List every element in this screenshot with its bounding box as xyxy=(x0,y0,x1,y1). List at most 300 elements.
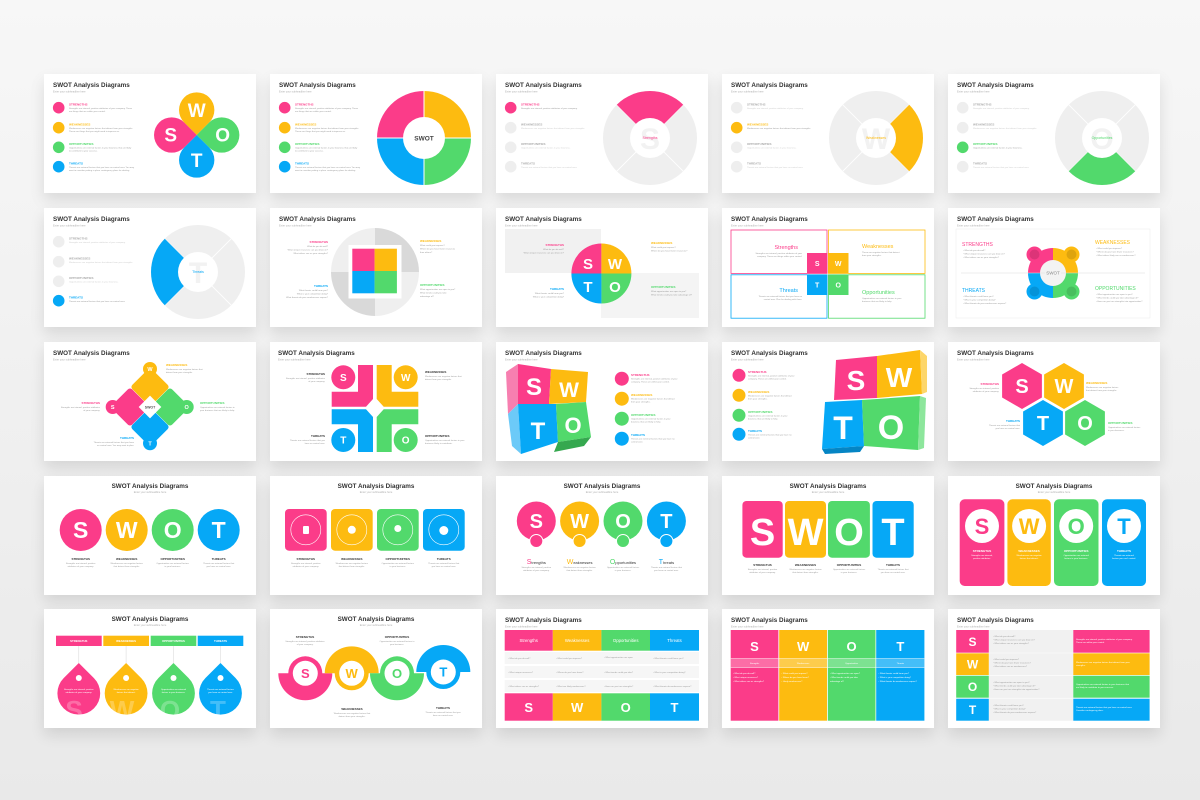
text blocks: Strengths are internal, positive attributes xyxy=(286,377,326,380)
list: STRENGTHS xyxy=(631,373,650,377)
text blocks: What is your competition doing? xyxy=(533,296,565,298)
text blocks: WEAKNESSES xyxy=(166,363,187,367)
drops: you have no control over. xyxy=(208,691,233,694)
text blocks: STRENGTHS xyxy=(980,382,999,386)
cubes xyxy=(506,364,591,454)
drops: Threats are external factors xyxy=(207,688,235,691)
title xyxy=(957,216,1034,228)
labels: of your company. xyxy=(297,643,314,646)
columns: • What threats do weaknesses expose? xyxy=(878,680,918,683)
labels: Threats are external factors that xyxy=(651,566,682,569)
list xyxy=(53,102,135,172)
title xyxy=(731,617,808,628)
columns: factors you can't control. xyxy=(1112,557,1136,560)
title: SWOT Analysis Diagrams xyxy=(338,483,415,490)
text blocks: • Where do you have fewer resources? xyxy=(1096,250,1135,254)
hexagons: S xyxy=(1015,376,1029,398)
title xyxy=(505,216,582,228)
text blocks: THREATS xyxy=(1006,419,1020,423)
letter blocks xyxy=(742,501,914,558)
list: OPPORTUNITIES xyxy=(973,142,998,146)
labels: Threats are external factors that xyxy=(877,568,909,571)
list: Threats are external factors that you have no control over. xyxy=(521,166,577,169)
columns: Weaknesses xyxy=(797,663,810,665)
question rows: • Where do you have fewer? xyxy=(556,671,584,674)
labels: in your business. xyxy=(841,571,858,574)
columns: • What others see as strengths? xyxy=(733,680,765,683)
columns: W xyxy=(797,639,810,654)
columns: Strengths xyxy=(750,662,760,665)
text blocks: What could you improve? xyxy=(651,246,676,249)
rows: T xyxy=(969,703,977,717)
list: Strengths are internal, positive attributes of your company. xyxy=(747,107,804,110)
list: Strengths are internal, positive attributes of your xyxy=(748,374,795,378)
title xyxy=(112,616,189,627)
title xyxy=(505,617,582,628)
ring with highlighted segment: O xyxy=(1090,123,1114,156)
labels: STRENGTHS xyxy=(297,557,315,561)
slide 8: SWOT circle quadrants xyxy=(496,208,708,327)
list xyxy=(53,236,133,306)
box texts: Opportunities xyxy=(862,290,895,296)
rows: • What trends could you take advantage of? xyxy=(993,684,1036,688)
slide 18: balloons xyxy=(496,476,708,595)
columns: Weaknesses are negative xyxy=(1017,554,1042,557)
rows: O xyxy=(968,680,977,694)
text blocks: WEAKNESSES xyxy=(1086,381,1107,385)
puzzle diagram: S xyxy=(340,373,347,384)
list: Threats are external factors that you have no control over. You may xyxy=(295,166,361,169)
title: Enter your subheadline here xyxy=(505,624,538,628)
cubes: T xyxy=(833,410,853,446)
labels: Strengths are internal, positive xyxy=(748,568,778,571)
text blocks: Opportunities are external factors in xyxy=(200,406,235,409)
title xyxy=(53,350,130,362)
slide 9: bordered boxes xyxy=(722,208,934,327)
rows: • What threats do your weaknesses expose? xyxy=(993,711,1037,714)
labels: Weaknesses are negative factors xyxy=(563,566,597,569)
labels: WEAKNESSES xyxy=(341,557,362,561)
circles: T xyxy=(212,517,226,543)
text blocks: What threats do your weaknesses expose? xyxy=(286,296,329,299)
slide 1: clover SWOT xyxy=(44,74,256,193)
list: business that are likely to help. xyxy=(631,420,661,424)
circle quadrants xyxy=(571,244,631,304)
text blocks: STRENGTHS xyxy=(306,372,325,376)
title xyxy=(53,82,130,94)
list: Threats are external factors that you have no xyxy=(631,438,675,440)
list: STRENGTHS xyxy=(295,102,314,106)
labels: attributes of your company. xyxy=(749,571,776,574)
list: company. These are within your control. xyxy=(748,378,787,380)
rows: • What others see as your strengths? xyxy=(993,642,1030,645)
labels: Strengths are internal, positive xyxy=(522,566,552,569)
slide 13: 3D cubes left xyxy=(496,342,708,461)
header bars: STRENGTHS xyxy=(70,639,88,643)
cubes: T xyxy=(531,418,546,445)
flower diagram: SWOT xyxy=(1046,270,1060,276)
list xyxy=(279,102,361,172)
labels: Weaknesses are negative factors xyxy=(789,568,823,571)
drops: Weaknesses are negative xyxy=(114,688,139,691)
boxes xyxy=(731,230,925,318)
header bars: THREATS xyxy=(214,639,227,643)
drops: Strengths are internal, positive xyxy=(64,688,94,691)
grey circle with colour grid xyxy=(331,228,419,316)
list: Threats are external factors that you have no xyxy=(748,434,792,436)
circles xyxy=(60,509,240,551)
title: Enter your subheadline here xyxy=(53,224,86,228)
columns: factors in your business. xyxy=(1064,557,1088,560)
diamond diagram xyxy=(106,362,194,450)
title: Enter your subheadline here xyxy=(586,490,619,494)
diamond diagram: W xyxy=(147,367,153,373)
text blocks: advantage of? xyxy=(420,295,435,298)
labels: THREATS xyxy=(212,557,226,561)
text blocks: OPPORTUNITIES xyxy=(651,285,676,289)
text blocks: of your company. xyxy=(308,380,325,383)
columns: Threats are external xyxy=(1114,554,1134,557)
labels: Opportunities xyxy=(610,559,636,566)
title: SWOT Analysis Diagrams xyxy=(957,216,1034,223)
list: WEAKNESSES xyxy=(747,122,768,126)
columns: • Where do you have fewer? xyxy=(782,676,810,679)
list: These are things that you might need to improve on. xyxy=(295,130,346,133)
text blocks: OPPORTUNITIES xyxy=(420,283,445,287)
wave circles: S xyxy=(301,666,310,681)
title xyxy=(279,216,356,228)
rows: • Where do you have fewer resources? xyxy=(993,662,1032,664)
title xyxy=(731,82,808,94)
list: These are things that you might need to improve on. xyxy=(69,130,120,133)
columns: S xyxy=(750,639,759,654)
labels: in your business. xyxy=(164,565,181,568)
clover diagram xyxy=(154,92,239,178)
text blocks: Weaknesses are negative factors that xyxy=(425,375,462,378)
balloons xyxy=(517,502,686,548)
slide 14: 3D cubes right xyxy=(722,342,934,461)
clover diagram: S xyxy=(164,126,177,146)
rows: • What threats could harm you? xyxy=(993,704,1024,707)
drops: attributes of your company. xyxy=(66,691,92,694)
circle quadrants: O xyxy=(609,279,621,296)
list: Weaknesses are negative factors that detract from your strengths. xyxy=(973,127,1037,130)
box texts: Strengths xyxy=(774,245,798,251)
text blocks: THREATS xyxy=(314,284,328,288)
list: control over. xyxy=(748,436,760,440)
labels xyxy=(522,559,682,572)
letter bars: T xyxy=(671,700,679,715)
ring with highlighted segment: S xyxy=(640,123,660,156)
title: SWOT Analysis Diagrams xyxy=(53,350,130,357)
list: WEAKNESSES xyxy=(69,256,90,260)
box texts: Threats are external factors that you have no xyxy=(758,295,803,298)
text blocks: that detract from your strengths. xyxy=(1086,389,1117,392)
list: Weaknesses are negative factors that detract from your strengths. xyxy=(295,127,359,130)
slide 6: Threats highlight xyxy=(44,208,256,327)
text blocks xyxy=(286,370,465,445)
balloons: W xyxy=(570,511,589,533)
labels: Weaknesses are negative factors xyxy=(336,562,369,565)
list: THREATS xyxy=(747,162,761,166)
drops: S xyxy=(65,695,83,725)
clover diagram: T xyxy=(191,151,203,172)
rows: Strengths are internal, positive attributes of your company. xyxy=(1076,638,1133,641)
ring with highlighted segment: T xyxy=(189,257,207,290)
puzzle diagram: O xyxy=(402,436,410,447)
ring with highlighted segment: Threats xyxy=(192,270,204,274)
centre letter squares: S xyxy=(815,261,820,268)
labels: attributes of your company. xyxy=(68,565,94,568)
text blocks: What opportunities are open to you? xyxy=(420,288,456,291)
slide 12: puzzle arrows xyxy=(270,342,482,461)
rows: • What opportunities are open to you? xyxy=(993,681,1030,684)
columns: advantage of? xyxy=(830,680,845,683)
text blocks: • What is your competition doing? xyxy=(963,298,996,302)
drops: T xyxy=(210,695,226,725)
text blocks: STRENGTHS xyxy=(81,401,100,405)
labels: Opportunities are external factors xyxy=(382,562,415,565)
columns: T xyxy=(1117,514,1131,539)
slide 16: four circles xyxy=(44,476,256,595)
wave circles: T xyxy=(439,665,447,680)
title xyxy=(731,350,808,362)
list: OPPORTUNITIES xyxy=(521,142,546,146)
columns xyxy=(960,499,1146,586)
columns: Threats xyxy=(897,662,905,665)
header bars xyxy=(505,630,699,651)
list: THREATS xyxy=(973,162,987,166)
title xyxy=(505,82,582,94)
list: Weaknesses are negative factors that detract xyxy=(748,394,792,398)
labels: your business. xyxy=(390,643,404,646)
drops: factors in your business. xyxy=(162,691,186,694)
title: SWOT Analysis Diagrams xyxy=(505,216,582,223)
list: THREATS xyxy=(295,162,309,166)
title: SWOT Analysis Diagrams xyxy=(505,617,582,624)
puzzle diagram: T xyxy=(340,436,346,447)
rows: • What do you do well? xyxy=(993,635,1016,638)
title: Enter your subheadline here xyxy=(505,90,538,94)
text blocks: STRENGTHS xyxy=(545,243,564,247)
columns: O xyxy=(847,639,857,654)
labels xyxy=(66,557,235,568)
labels xyxy=(285,635,461,718)
text blocks: of your company. xyxy=(83,409,100,412)
text blocks xyxy=(969,381,1141,432)
puzzle diagram xyxy=(331,365,418,452)
title: SWOT Analysis Diagrams xyxy=(279,216,356,223)
title: SWOT Analysis Diagrams xyxy=(279,82,356,89)
list: Opportunities are external factors in your business. xyxy=(69,280,119,284)
header bars: Strengths xyxy=(519,638,538,643)
header bars xyxy=(56,636,243,663)
clover diagram: W xyxy=(188,101,206,122)
box texts: company. These are things within your control. xyxy=(757,255,802,258)
text blocks: • What do you do well? xyxy=(963,249,986,252)
text blocks: Threats are external factors that you have xyxy=(94,441,135,444)
rows: • What others see as weaknesses? xyxy=(993,665,1028,668)
labels: that detract from strengths. xyxy=(792,571,819,574)
columns: positive attributes. xyxy=(973,557,991,560)
columns: T xyxy=(896,639,904,654)
labels: you have no control over. xyxy=(654,569,679,572)
list: STRENGTHS xyxy=(69,102,88,106)
labels: you have no control over. xyxy=(432,565,456,568)
text blocks: in your business. xyxy=(1108,429,1125,432)
cubes: O xyxy=(878,409,904,447)
ring with highlighted segment: Strengths xyxy=(643,136,658,140)
text blocks: • What could you improve? xyxy=(1096,247,1123,250)
list: STRENGTHS xyxy=(973,102,992,106)
hexagons xyxy=(1002,363,1105,446)
list: THREATS xyxy=(521,162,535,166)
text blocks xyxy=(524,241,693,298)
text blocks: • What others likely see as weaknesses? xyxy=(1096,254,1136,257)
drops xyxy=(57,663,242,725)
text blocks: THREATS xyxy=(962,288,986,294)
text blocks: you have no control over. xyxy=(996,427,1020,430)
title: SWOT Analysis Diagrams xyxy=(957,350,1034,357)
title: SWOT Analysis Diagrams xyxy=(53,216,130,223)
text blocks: • What threats do your weaknesses expose? xyxy=(963,302,1007,305)
ring with highlighted segment: W xyxy=(862,123,891,156)
title xyxy=(505,350,582,362)
text blocks xyxy=(61,363,235,447)
title: Enter your subheadline here xyxy=(505,358,538,362)
centre letter squares: W xyxy=(835,261,842,268)
title xyxy=(1016,483,1093,494)
text blocks: THREATS xyxy=(311,434,325,438)
list: STRENGTHS xyxy=(69,236,88,240)
text blocks: THREATS xyxy=(550,287,564,291)
columns: • What could you improve? xyxy=(782,672,808,675)
slide 2: SWOT ring xyxy=(270,74,482,193)
question rows: • How can you turn strengths? xyxy=(604,685,634,688)
question rows: • What could you improve? xyxy=(556,657,583,660)
icon squares xyxy=(285,509,465,551)
labels: that detract from strengths. xyxy=(339,565,365,568)
slide 17: icon squares xyxy=(270,476,482,595)
text blocks: What opportunities are open to you? xyxy=(651,290,687,293)
clover diagram: O xyxy=(215,126,230,146)
list: from your strengths. xyxy=(748,398,768,400)
slide 15: hexagons xyxy=(948,342,1160,461)
list: WEAKNESSES xyxy=(521,122,542,126)
labels: Opportunities are external factors xyxy=(607,566,640,569)
rows: Threats are external factors that you have no control over. xyxy=(1076,706,1132,709)
circles: W xyxy=(116,517,138,543)
ring chart: SWOT xyxy=(414,136,434,142)
labels xyxy=(748,563,909,574)
title xyxy=(957,617,1034,628)
title: SWOT Analysis Diagrams xyxy=(53,82,130,89)
cubes: S xyxy=(847,365,865,396)
slide 25: row table xyxy=(948,609,1160,728)
circles: S xyxy=(73,517,88,543)
box texts: These are negative factors that detract xyxy=(862,251,900,254)
balloons: T xyxy=(660,511,673,533)
list: Strengths are internal, positive attributes of your company. These xyxy=(69,107,133,110)
text blocks: Weaknesses are negative factors that xyxy=(166,368,203,371)
letter blocks: S xyxy=(750,512,775,554)
labels: Weaknesses xyxy=(567,559,592,566)
text blocks: than others? xyxy=(420,251,433,254)
header bars: Weaknesses xyxy=(565,638,589,643)
text blocks: What do you do well? xyxy=(543,248,565,251)
text blocks: WEAKNESSES xyxy=(420,239,441,243)
letter blocks: O xyxy=(834,512,864,554)
list xyxy=(732,369,795,441)
list: Strengths are internal, positive attributes of your company. xyxy=(69,241,126,244)
title: Enter your subheadline here xyxy=(731,624,764,628)
rows: • How can you turn strengths into opportunities? xyxy=(993,688,1040,691)
labels xyxy=(291,557,460,568)
labels: Strengths xyxy=(527,559,546,566)
puzzle diagram: W xyxy=(401,373,411,384)
box texts xyxy=(756,244,902,303)
list: are things that are within your control. xyxy=(69,110,106,113)
cubes: W xyxy=(559,379,579,402)
labels: Weaknesses are negative factors xyxy=(111,562,144,565)
question rows: • What trends could you take? xyxy=(604,671,634,674)
labels: you have no control over. xyxy=(206,565,231,568)
list xyxy=(615,372,678,446)
title: Enter your subheadline here xyxy=(360,490,393,494)
labels: Threats are external factors that xyxy=(203,562,235,565)
text blocks: Threats are external factors that xyxy=(989,424,1020,427)
ring with highlighted segment: Weaknesses xyxy=(866,136,886,140)
text blocks: What threats could harm you? xyxy=(299,289,329,292)
rows: S xyxy=(968,635,977,649)
labels: OPPORTUNITIES xyxy=(837,563,861,567)
question rows: • What opportunities are open xyxy=(604,656,634,659)
text blocks: business likely to contribute. xyxy=(425,442,453,445)
labels: Opportunities are external factors in xyxy=(380,640,415,643)
columns: • What opportunities are open? xyxy=(830,672,861,675)
list: company. These are within your control. xyxy=(631,380,670,384)
title xyxy=(53,216,130,228)
list: OPPORTUNITIES xyxy=(69,142,94,146)
title xyxy=(338,616,415,627)
text blocks: OPPORTUNITIES xyxy=(1108,421,1133,425)
columns: • Likely weaknesses? xyxy=(782,681,803,683)
list: want to consider putting in place contingency plans for dealing. xyxy=(295,169,356,172)
labels: OPPORTUNITIES xyxy=(385,635,409,639)
question rows: • What unique resources? xyxy=(508,671,534,674)
flower diagram xyxy=(1026,246,1080,300)
text blocks: attributes of your company. xyxy=(973,390,999,393)
list: to contribute to your success. xyxy=(295,150,324,152)
labels: Weaknesses are negative factors that xyxy=(334,712,371,715)
list: to contribute to your success. xyxy=(69,150,98,152)
text blocks: THREATS xyxy=(120,436,134,440)
box texts: Opportunities are external factors in your xyxy=(862,297,902,300)
slide 4: Weaknesses highlight xyxy=(722,74,934,193)
list: Opportunities are external factors in your business. xyxy=(973,146,1023,150)
text blocks: • What others see as your strengths? xyxy=(963,256,1000,259)
cubes: O xyxy=(564,413,582,438)
question rows xyxy=(505,652,699,692)
labels: THREATS xyxy=(436,706,450,710)
list: THREATS xyxy=(69,296,83,300)
labels: that detract from strengths. xyxy=(114,565,140,568)
text blocks xyxy=(961,240,1145,305)
letter blocks: T xyxy=(881,512,905,554)
labels: detract from your strengths. xyxy=(339,715,366,718)
box texts: from your strengths. xyxy=(862,254,882,257)
slide 11: diamond xyxy=(44,342,256,461)
